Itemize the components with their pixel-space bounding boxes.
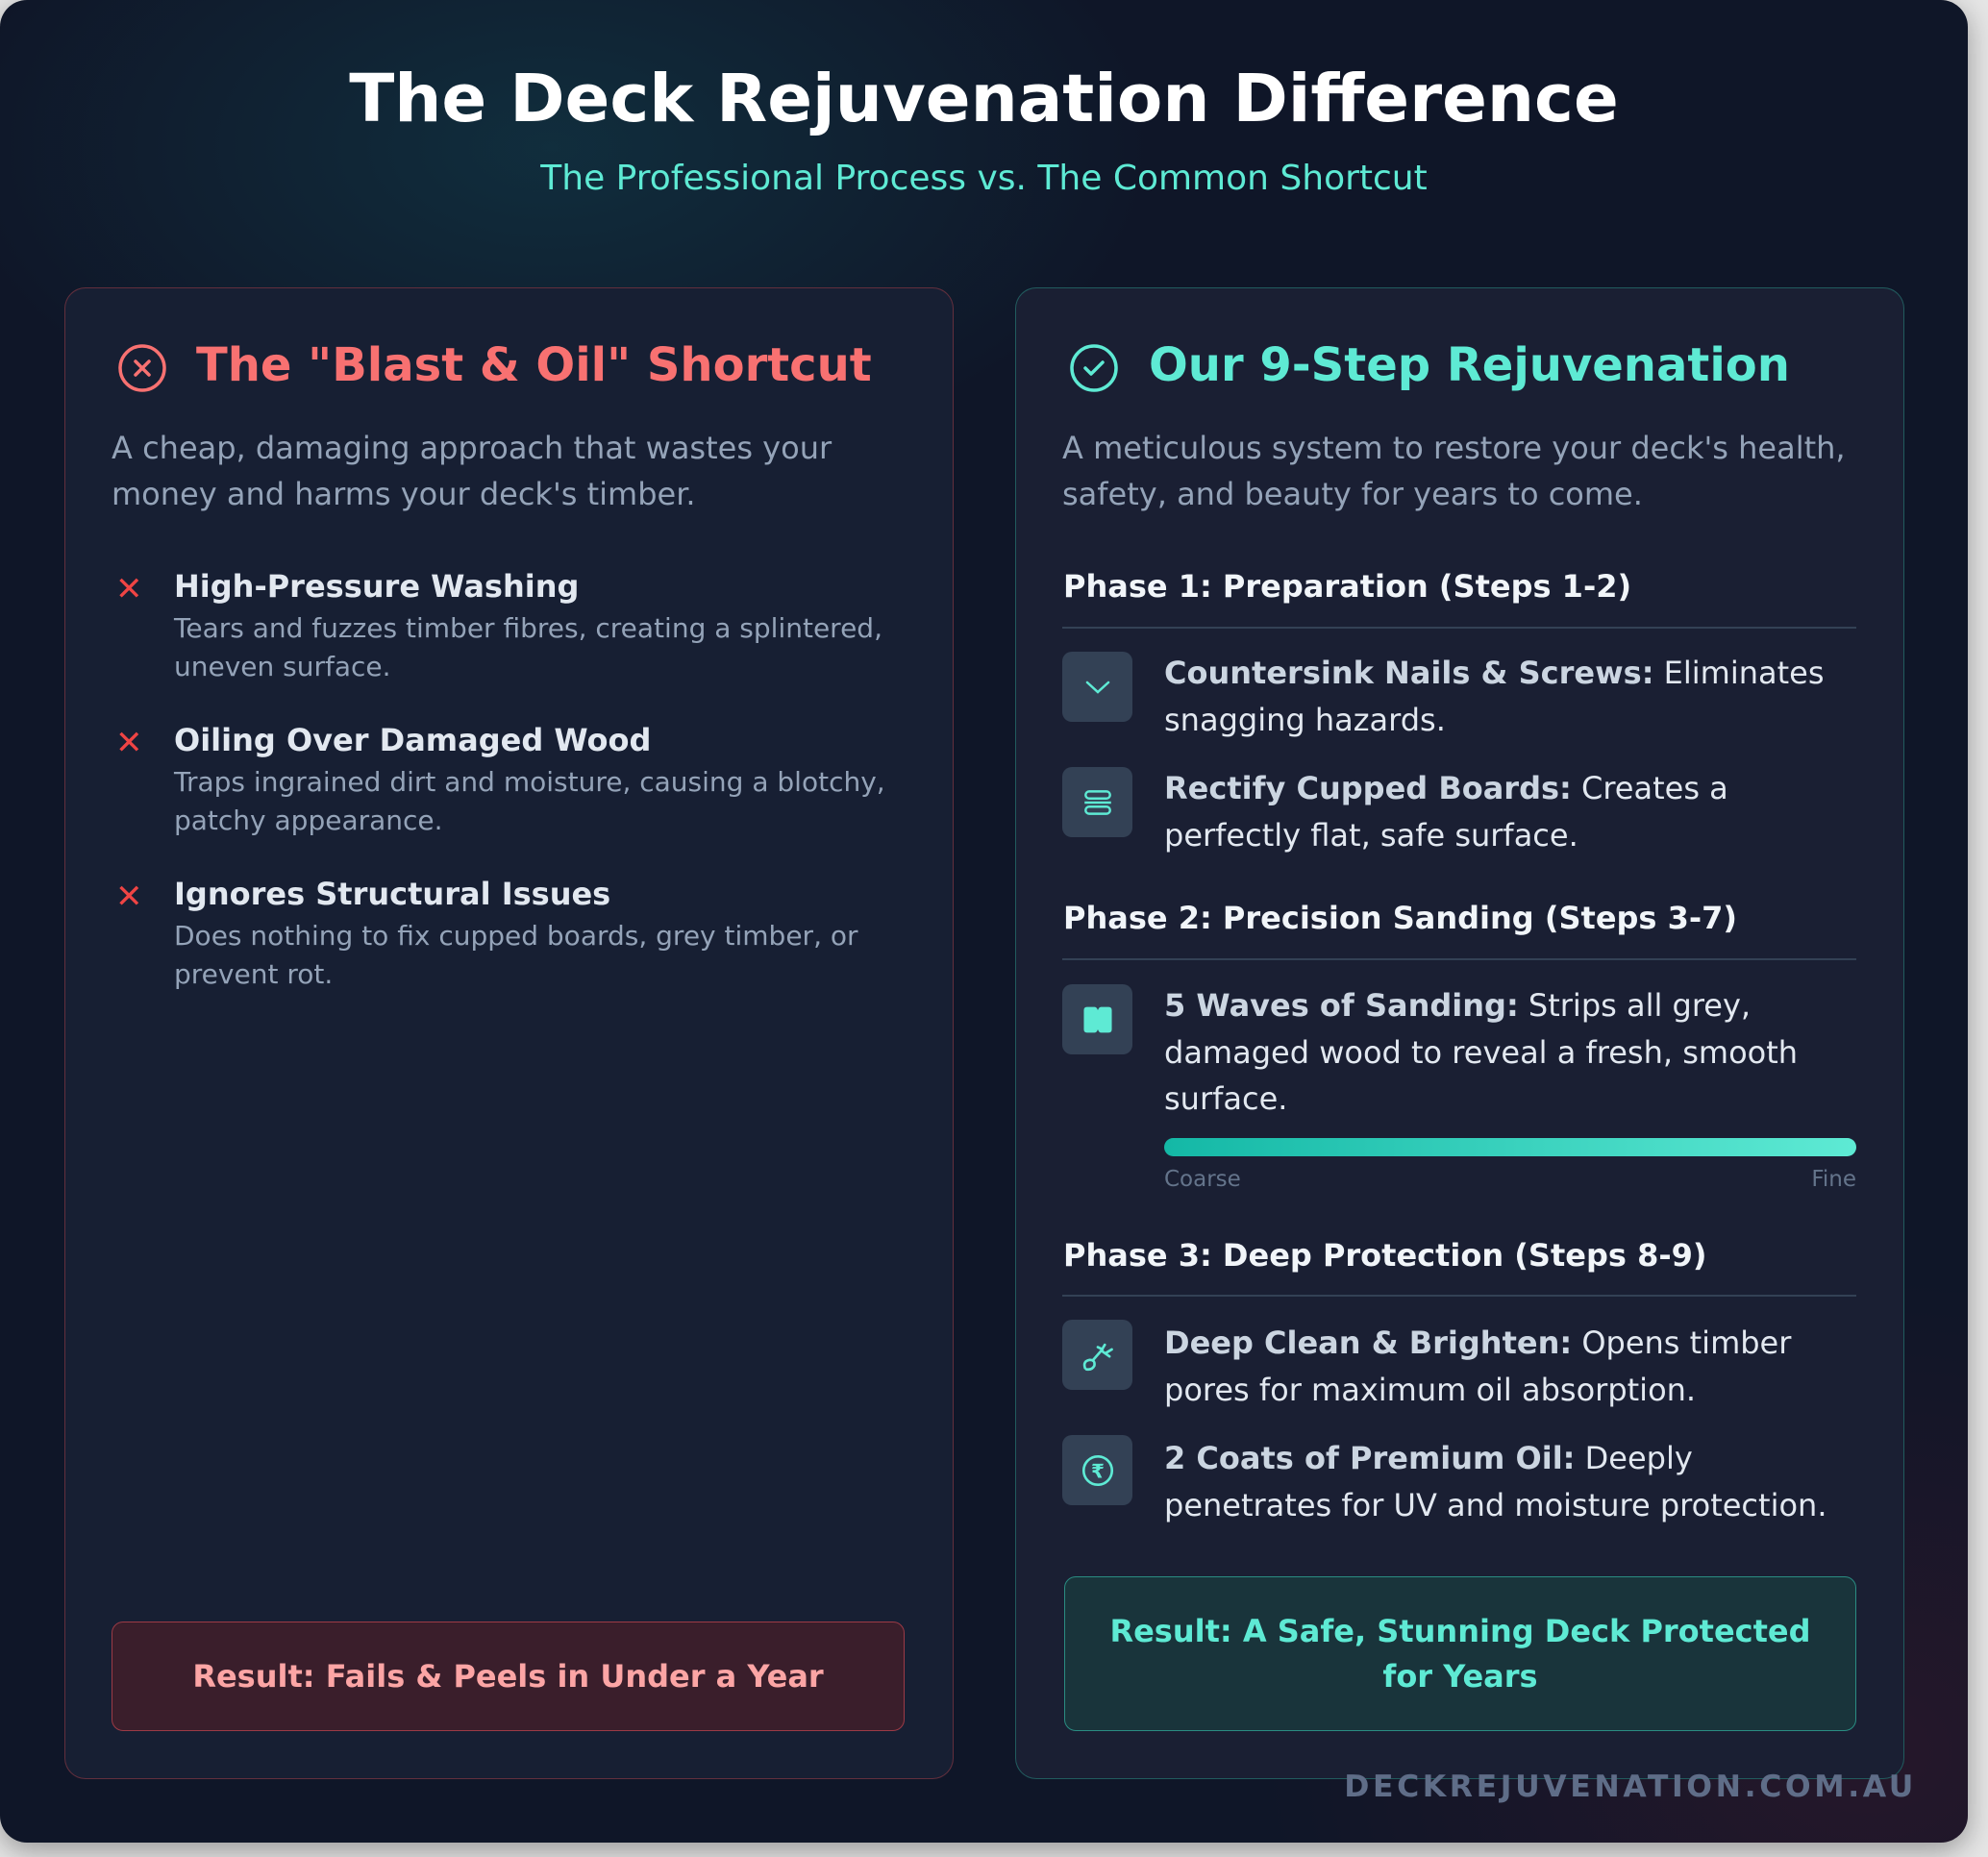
text: shortcut description: money and harms your deck's timber. xyxy=(112,475,696,511)
text: Traps ingrained dirt and moisture, causing a blotchy, xyxy=(174,766,885,798)
text: rejuvenation description xyxy=(1062,430,1846,511)
text: Ignores Structural Issues xyxy=(174,876,610,912)
chart: sanding grit bar: Fine xyxy=(1811,1167,1856,1192)
icon: oil: ₹ xyxy=(1091,1459,1104,1482)
icon: check circle xyxy=(1070,344,1118,392)
heading: phase 2: Phase 2: Precision Sanding (Steps 3-7) xyxy=(1063,900,1737,936)
icon: x circle xyxy=(118,344,166,392)
subtitle: The Professional Process vs. The Common Shortcut xyxy=(540,159,1428,198)
text: Oiling Over Damaged Wood xyxy=(174,722,651,758)
callout: success result xyxy=(1064,1576,1856,1731)
callout: fail result: Result: Fails & Peels in Under a Year xyxy=(192,1658,824,1695)
text: shortcut description xyxy=(112,430,832,511)
step: sanding: 5 Waves of Sanding: Strips all grey, damaged wood to reveal a fresh, smooth surface. xyxy=(1164,987,1798,1117)
chart: sanding grit bar xyxy=(1164,1138,1856,1192)
footer: website: DECKREJUVENATION.COM.AU xyxy=(1344,1770,1917,1804)
icon: oil xyxy=(1062,1435,1132,1505)
step: clean: Deep Clean & Brighten: Opens timber xyxy=(1164,1325,1791,1361)
step: countersink: Countersink Nails & Screws: Eliminates snagging hazards. xyxy=(1164,655,1825,738)
text: rejuvenation description: safety, and beauty for years to come. xyxy=(1062,475,1643,511)
panel: blast & oil shortcut xyxy=(64,287,954,1779)
step: cupped boards: perfectly flat, safe surface. xyxy=(1164,817,1578,854)
icon: sanding xyxy=(1062,984,1132,1054)
heading: phase 1: Phase 1: Preparation (Steps 1-2) xyxy=(1063,568,1631,605)
step: oil xyxy=(1164,1440,1826,1523)
step: oil: penetrates for UV and moisture protection. xyxy=(1164,1486,1826,1523)
heading: rejuvenation: Our 9-Step Rejuvenation xyxy=(1149,338,1790,392)
step: cupped boards: Rectify Cupped Boards: Creates a xyxy=(1164,770,1728,806)
text: patchy appearance. xyxy=(174,805,443,836)
callout: success result: Result: A Safe, Stunning Deck Protected xyxy=(1109,1613,1811,1649)
icon: clean xyxy=(1062,1320,1132,1390)
icon: countersink xyxy=(1062,652,1132,722)
step: clean xyxy=(1164,1325,1792,1407)
heading: shortcut: The "Blast & Oil" Shortcut xyxy=(196,338,872,392)
step: clean: pores for maximum oil absorption. xyxy=(1164,1371,1696,1407)
step: oil: 2 Coats of Premium Oil: Deeply xyxy=(1164,1440,1693,1476)
text: ✕ xyxy=(115,570,142,608)
heading: phase 3: Phase 3: Deep Protection (Steps 8-9) xyxy=(1063,1237,1707,1274)
text: Tears and fuzzes timber fibres, creating a splintered, xyxy=(174,612,882,644)
chart: sanding grit bar: Coarse xyxy=(1164,1167,1241,1192)
icon: cupped boards xyxy=(1062,767,1132,837)
callout: success result: for Years xyxy=(1382,1657,1538,1694)
panel: 9-step rejuvenation xyxy=(1015,287,1904,1779)
item: ignores structural issues xyxy=(115,876,858,990)
text: ✕ xyxy=(115,724,142,762)
text: shortcut description: A cheap, damaging approach that wastes your xyxy=(112,430,832,466)
item: oiling over damaged wood xyxy=(115,722,885,836)
title: The Deck Rejuvenation Difference xyxy=(349,61,1619,137)
step: cupped boards xyxy=(1164,770,1728,854)
text: uneven surface. xyxy=(174,651,391,682)
text: prevent rot. xyxy=(174,958,333,990)
item: high-pressure washing xyxy=(115,568,882,682)
callout: fail result xyxy=(112,1622,905,1731)
text: Does nothing to fix cupped boards, grey timber, or xyxy=(174,920,858,952)
text: rejuvenation description: A meticulous system to restore your deck's health, xyxy=(1062,430,1846,466)
text: ✕ xyxy=(115,878,142,916)
text: High-Pressure Washing xyxy=(174,568,579,605)
